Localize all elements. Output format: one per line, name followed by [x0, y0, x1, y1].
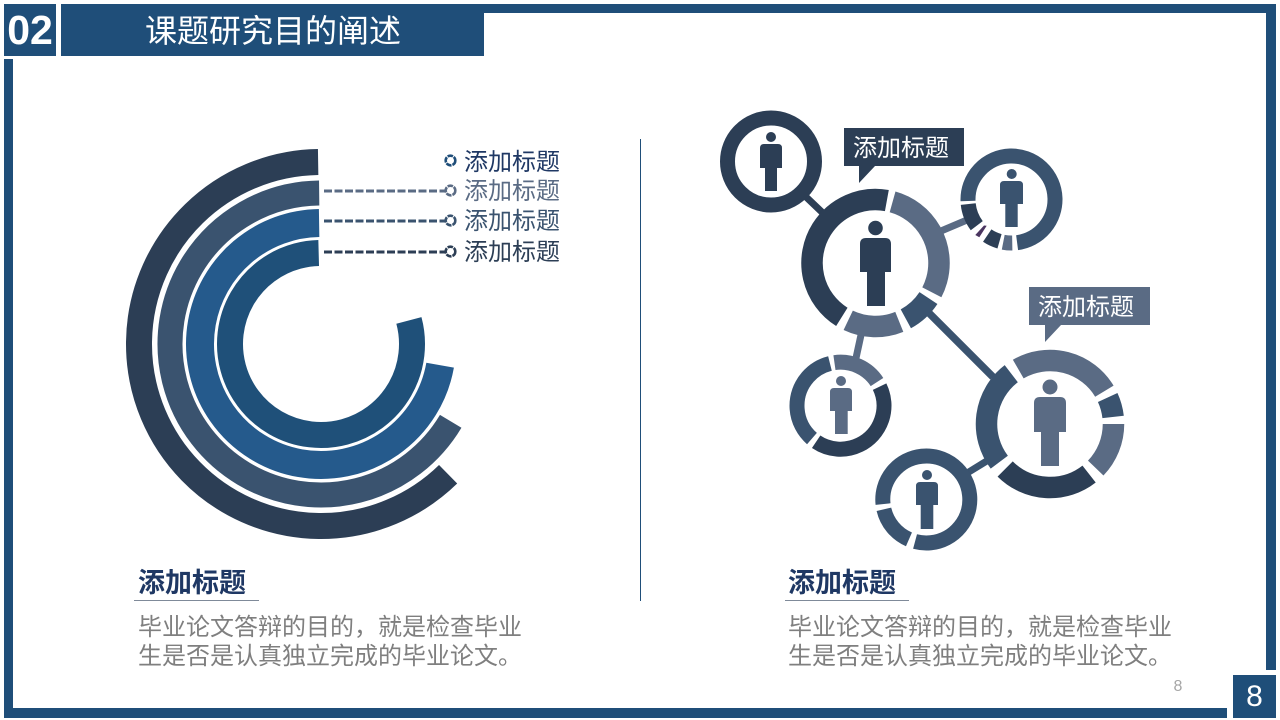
header title box [61, 4, 484, 56]
node: top centre large ring with person [788, 175, 963, 351]
node: top right ring with person [951, 139, 1072, 260]
callout text: dark: 添加标题 [853, 135, 949, 162]
left body text [138, 614, 522, 670]
node: lower left ring with person [779, 344, 902, 467]
divider between panels [640, 139, 641, 601]
heading underlines [134, 600, 909, 601]
header number: 02 [7, 7, 53, 53]
chart: concentric arc rings [64, 87, 578, 601]
right body text: 毕业论文答辩的目的，就是检查毕业 [788, 614, 1172, 641]
legend label 2: 添加标题 [464, 178, 560, 205]
node: bottom ring with person [869, 442, 984, 557]
node: lower right large ring with person [961, 335, 1139, 513]
right body text: 生是否是认真独立完成的毕业论文。 [788, 643, 1172, 670]
left heading: 添加标题 [138, 568, 246, 598]
title: 课题研究目的阐述 [145, 13, 401, 49]
callout box: dark [844, 128, 964, 183]
legend label 1: 添加标题 [464, 149, 560, 176]
page number: 8 [1246, 680, 1263, 713]
chart leader lines and markers [324, 156, 455, 256]
legend label 4: 添加标题 [464, 239, 560, 266]
right heading: 添加标题 [788, 568, 896, 598]
page number box [1233, 675, 1276, 718]
left body text: 毕业论文答辩的目的，就是检查毕业 [138, 614, 522, 641]
small page number: 8 [1174, 678, 1182, 695]
callout text: slate: 添加标题 [1038, 294, 1134, 321]
left body text: 生是否是认真独立完成的毕业论文。 [138, 643, 522, 670]
network connectors [804, 195, 993, 472]
callout box: slate [1029, 287, 1150, 342]
header number box [4, 4, 56, 56]
legend label 3: 添加标题 [464, 208, 560, 235]
right body text [788, 614, 1172, 670]
node: top left ring with person [728, 118, 814, 205]
